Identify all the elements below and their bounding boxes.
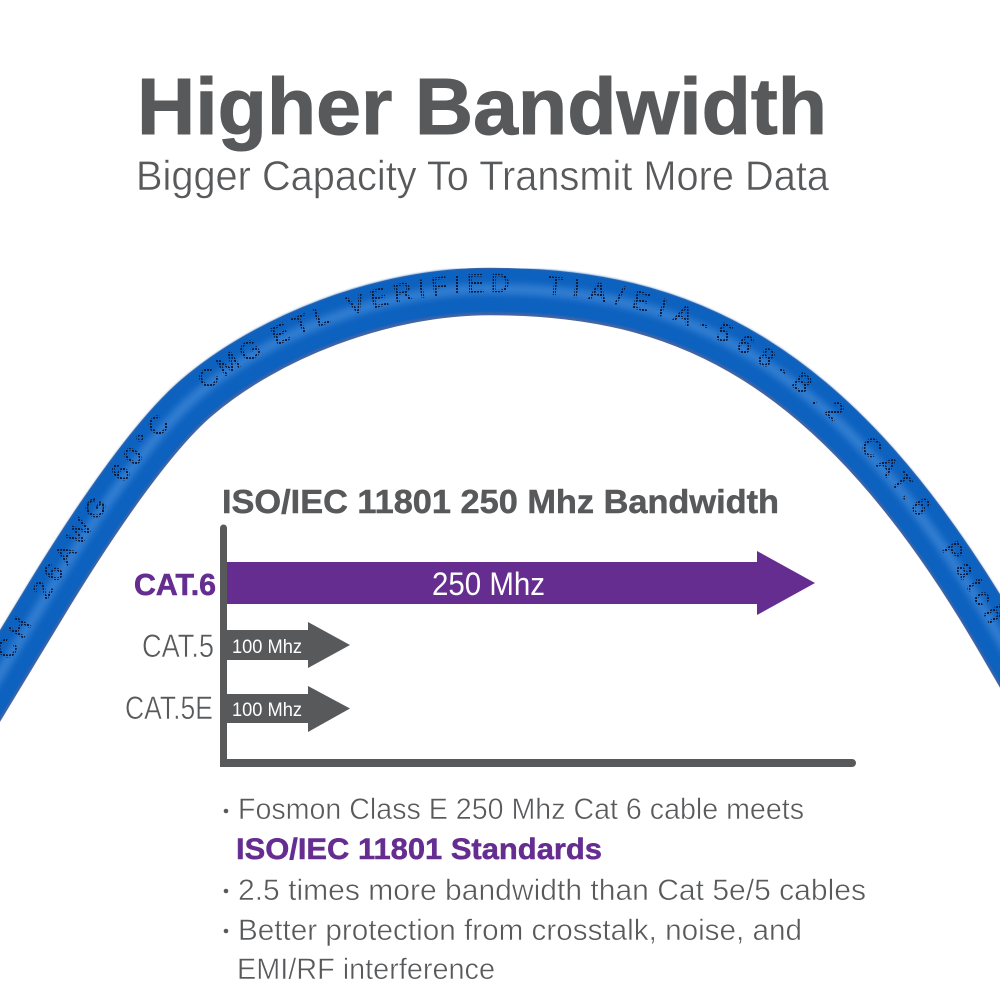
gray arrow [227, 686, 350, 732]
bullet 3 [224, 914, 802, 986]
CAT.6 label: CAT.6 [134, 567, 216, 602]
feature bullet list [224, 793, 866, 986]
cable printed marking: VERIFIED [345, 274, 508, 314]
cable body [0, 289, 1000, 726]
bullet 2: 2.5 times more bandwidth than Cat 5e/5 cables [238, 874, 866, 907]
CAT.5E row [125, 686, 350, 732]
title: Higher Bandwidth [137, 62, 827, 151]
bandwidth chart [125, 524, 856, 767]
bullet 3: Better protection from crosstalk, noise, and [238, 914, 802, 947]
bullet 3: EMI/RF interference [237, 953, 495, 986]
100 Mhz value: 100 Mhz [232, 699, 302, 721]
chart axes [220, 524, 856, 767]
CAT.5E label: CAT.5E [125, 690, 213, 726]
bullet 1 [224, 793, 804, 866]
subtitle: Bigger Capacity To Transmit More Data [136, 152, 830, 199]
bullet 1: ISO/IEC 11801 Standards [236, 833, 602, 866]
cable printed marking: 26AWG [34, 498, 106, 599]
CAT.6 row [134, 551, 815, 615]
cable printed marking: CMG [199, 340, 260, 388]
cable printed marking [0, 274, 1000, 658]
cable printed marking: 60°C [112, 415, 167, 480]
gray arrow [227, 622, 350, 668]
250 Mhz value: 250 Mhz [432, 566, 545, 602]
purple arrow [227, 551, 815, 615]
blue ethernet cable [0, 268, 1000, 722]
bullet 1: Fosmon Class E 250 Mhz Cat 6 cable meets [238, 793, 804, 826]
cable printed marking: TIA/EIA-568-B.2 [549, 276, 844, 422]
CAT.5 label: CAT.5 [142, 628, 214, 664]
100 Mhz value: 100 Mhz [232, 636, 302, 658]
CAT.5 row [142, 622, 350, 668]
cable printed marking: ETL [270, 309, 330, 344]
cable printed marking: CAT.6 [862, 438, 930, 515]
chart heading: ISO/IEC 11801 250 Mhz Bandwidth [222, 483, 779, 520]
